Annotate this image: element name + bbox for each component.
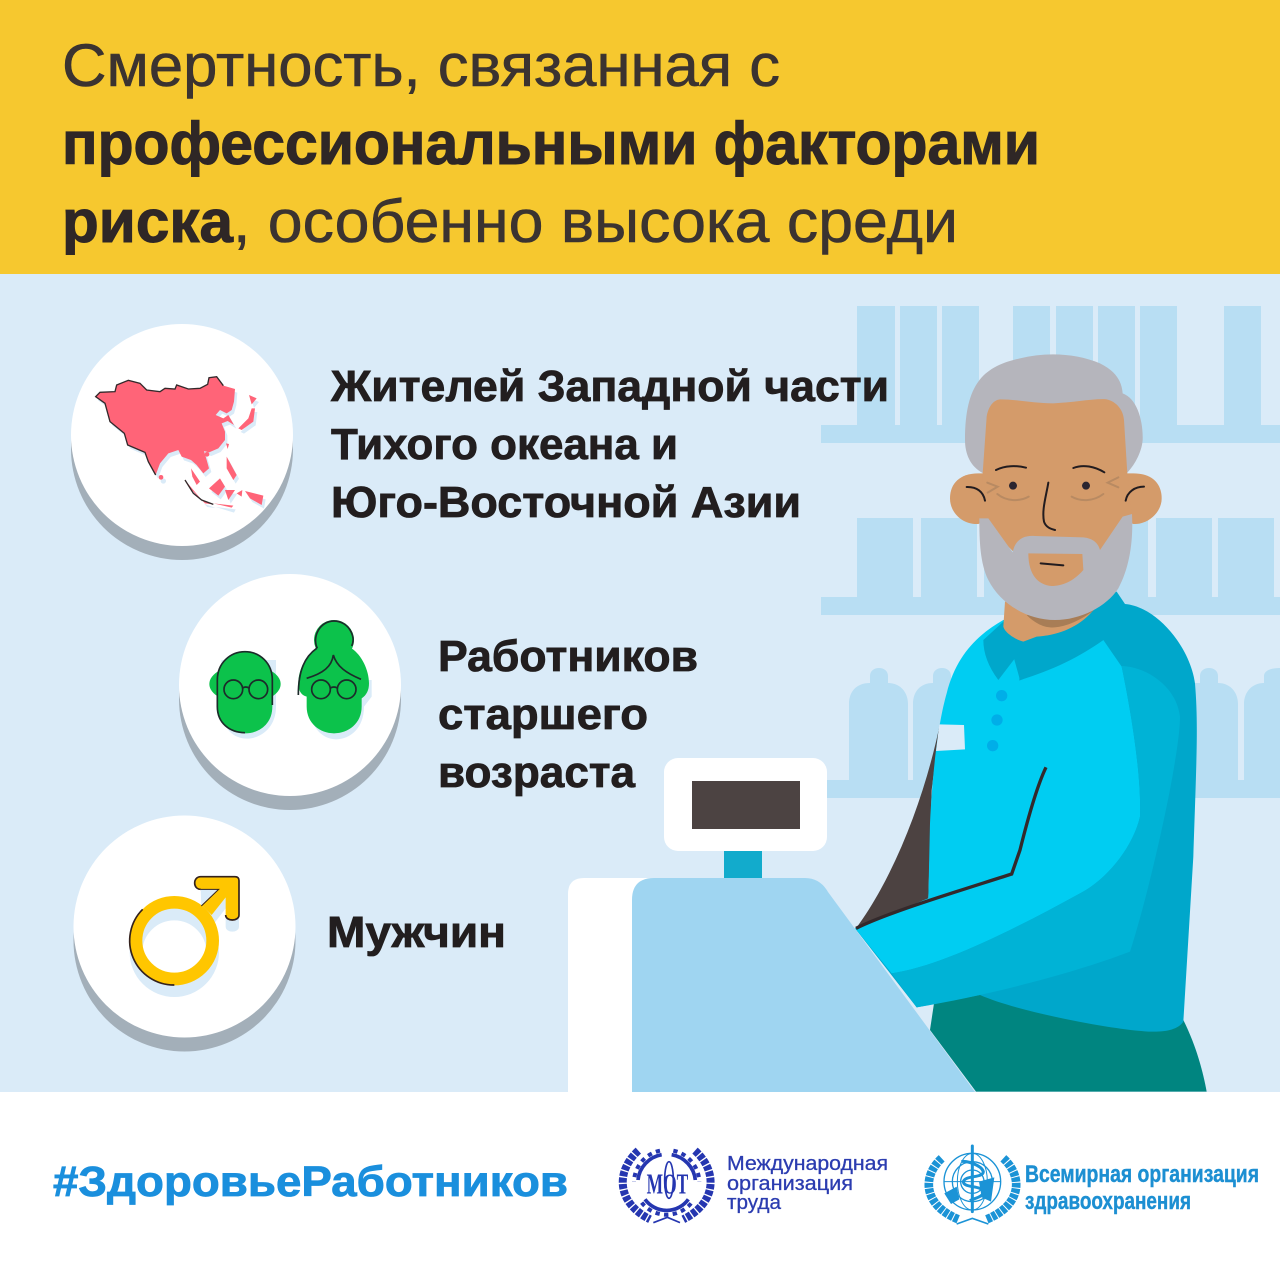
header band with title: риска [62, 188, 234, 255]
text: WHO name: здравоохранения [1025, 1188, 1191, 1215]
icon: map of Asia in circle [71, 324, 293, 560]
text: ILO name [727, 1153, 888, 1214]
illustration: cashier at register [568, 354, 1207, 1092]
cashier body [855, 592, 1207, 1092]
header band with title: , особенно высока среди [233, 188, 958, 255]
logo: International Labour Organization [623, 1151, 888, 1223]
cash register display [664, 758, 827, 878]
logo: World Health Organization [929, 1146, 1259, 1224]
text: older workers: старшего [438, 690, 648, 739]
text: residents of region [330, 362, 889, 527]
icon: WHO emblem [929, 1146, 1016, 1224]
text: older workers [438, 632, 698, 797]
text: residents of region: Юго-Восточной Азии [331, 478, 801, 527]
text: ILO name: труда [727, 1192, 782, 1214]
text: ILO name: организация [727, 1173, 853, 1195]
background shelves with products [821, 306, 1280, 798]
hashtag: #ЗдоровьеРаботников [53, 1158, 568, 1206]
text: residents of region: Жителей Западной части [330, 362, 889, 411]
text: older workers: возраста [438, 748, 636, 797]
header band with title: профессиональными факторами [62, 110, 1040, 177]
item 2: older workers [179, 574, 698, 810]
icon: ILO emblem: МОТ [647, 1169, 689, 1200]
register body [632, 878, 975, 1092]
text: ILO name: Международная [727, 1153, 888, 1175]
cashier head [950, 354, 1162, 642]
text: older workers: Работников [438, 632, 698, 681]
text: WHO name [1025, 1161, 1259, 1215]
icon: ILO emblem [623, 1151, 711, 1223]
icon: male symbol in circle [74, 816, 296, 1052]
text: men: Мужчин [327, 908, 506, 957]
header band with title [0, 0, 1280, 274]
item 3: men [74, 816, 506, 1052]
header band with title: Смертность, связанная с [62, 32, 780, 99]
text: residents of region: Тихого океана и [331, 420, 678, 469]
icon: two elderly heads in circle [179, 574, 401, 810]
back counter [568, 878, 660, 1092]
item 1: western pacific and south-east asia [71, 324, 889, 560]
